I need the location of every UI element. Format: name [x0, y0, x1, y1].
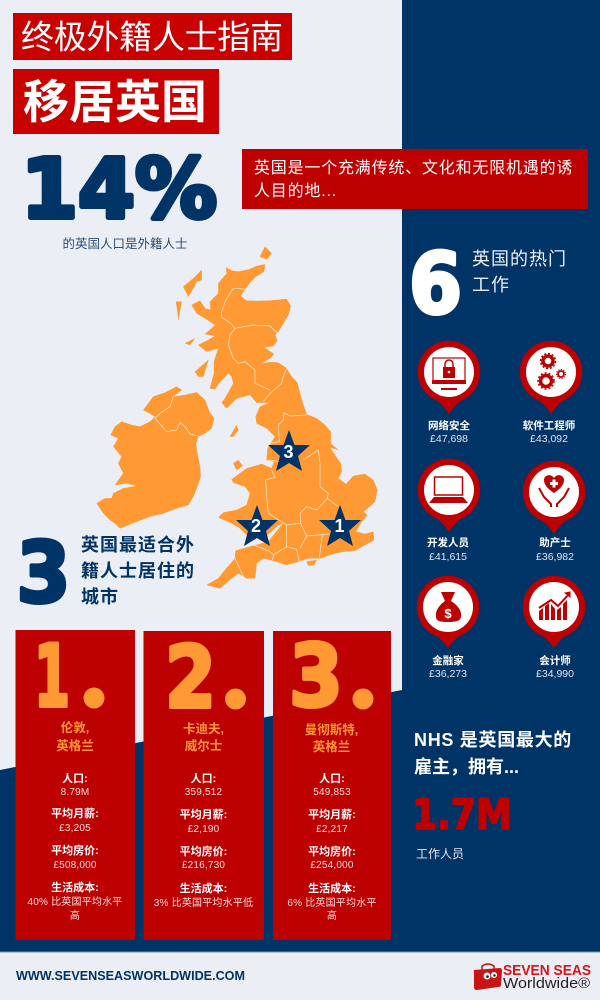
panel: Cardiff: 生活成本: — [180, 881, 227, 895]
panel: London: £3,205 — [59, 823, 91, 834]
heading: top 6 jobs — [409, 235, 567, 333]
map marker: star 1 — [319, 505, 361, 546]
logo: Seven Seas Worldwide: SEVEN SEAS — [503, 963, 591, 979]
callout: NHS: 雇主，拥有... — [414, 756, 519, 777]
panel: London: 40% 比英国平均水平 — [28, 895, 122, 908]
panel: London: 1 — [34, 627, 70, 727]
job: financier — [417, 576, 479, 680]
panel: London: 平均房价: — [51, 843, 99, 857]
job: software engineer: £43,092 — [530, 433, 568, 445]
panel: Manchester: £2,217 — [316, 824, 348, 835]
panel: London: 高 — [70, 909, 80, 922]
panel: Manchester: 6% 比英国平均水平 — [287, 896, 377, 909]
callout: intro: 人目的地... — [254, 182, 337, 200]
callout: NHS: 1.7M — [412, 790, 512, 839]
panel: Manchester: 英格兰 — [313, 739, 350, 754]
job: software engineer — [520, 341, 582, 445]
panel: Cardiff: £2,190 — [188, 824, 220, 835]
panel: Manchester: 平均月薪: — [308, 807, 356, 821]
callout: intro — [242, 149, 588, 209]
job: software engineer: 软件工程师 — [523, 419, 576, 432]
panel: Manchester: 平均房价: — [308, 844, 356, 858]
panel: Cardiff: 威尔士 — [185, 738, 222, 753]
panel: London: 人口: — [62, 772, 88, 785]
title: guide: 终极外籍人士指南 — [21, 18, 283, 56]
panel: Cardiff: 人口: — [191, 772, 216, 785]
heading: top 6 jobs: 6 — [409, 235, 462, 333]
job: financier: £36,273 — [429, 668, 467, 680]
panel: Manchester: 生活成本: — [308, 881, 356, 895]
job: accountant: £34,990 — [536, 668, 574, 680]
statistic: 14 percent: 的英国人口是外籍人士 — [62, 236, 188, 251]
callout: intro: 英国是一个充满传统、文化和无限机遇的诱 — [254, 159, 573, 177]
job: cyber security — [418, 341, 480, 445]
heading: top 3 cities: 城市 — [81, 586, 119, 607]
job: midwife — [523, 461, 585, 563]
panel: Manchester: 高 — [327, 909, 337, 922]
panel: Manchester: £254,000 — [310, 860, 354, 871]
footer: website: WWW.SEVENSEASWORLDWIDE.COM — [16, 968, 245, 983]
logo: Seven Seas Worldwide — [474, 963, 591, 992]
job: accountant — [523, 576, 585, 680]
panel: Cardiff: 359,512 — [185, 787, 223, 798]
callout: NHS: NHS 是英国最大的 — [414, 729, 572, 750]
panel: London: 伦敦, — [61, 720, 89, 735]
panel: London — [16, 627, 135, 940]
job: financier: 金融家 — [432, 654, 464, 667]
panel: Cardiff: £216,730 — [182, 860, 225, 871]
statistic: 14 percent: 14% — [21, 142, 217, 238]
logo: Seven Seas Worldwide: Worldwide® — [503, 975, 590, 992]
job: cyber security: 网络安全 — [428, 419, 470, 432]
heading: top 3 cities: 籍人士居住的 — [81, 561, 195, 581]
job: developer: 开发人员 — [427, 536, 469, 549]
panel: Cardiff: 平均房价: — [180, 844, 227, 858]
job: cyber security: £47,698 — [430, 433, 468, 445]
job: developer: £41,615 — [429, 551, 467, 563]
map marker: star 3: 3 — [283, 442, 294, 462]
panel: Cardiff: 平均月薪: — [180, 807, 227, 821]
heading: top 6 jobs: 工作 — [472, 275, 510, 295]
panel: Cardiff: 2 — [165, 628, 216, 728]
panel: London: 平均月薪: — [51, 806, 99, 820]
job: midwife: £36,982 — [536, 551, 574, 563]
panel: London: 英格兰 — [56, 738, 94, 753]
heading: top 3 cities: 英国最适合外 — [81, 534, 195, 555]
title: moving to UK: 移居英国 — [23, 76, 207, 128]
heading: top 3 cities: 3 — [16, 524, 70, 622]
job: developer — [418, 459, 480, 563]
panel: Manchester: 549,853 — [313, 787, 351, 798]
heading: top 6 jobs: 英国的热门 — [472, 249, 567, 269]
panel: Manchester: 人口: — [319, 772, 345, 785]
callout: NHS — [412, 729, 572, 861]
panel: London: 8.79M — [61, 787, 89, 798]
map marker: star 3 — [268, 430, 310, 471]
map: UK and Ireland — [97, 247, 377, 588]
panel: Cardiff: 卡迪夫, — [183, 721, 224, 736]
panel: London: 生活成本: — [51, 880, 99, 894]
job: accountant: 会计师 — [539, 654, 571, 667]
panel: Manchester — [273, 627, 391, 940]
heading: top 3 cities — [16, 524, 195, 622]
panel: Cardiff: 3% 比英国平均水平低 — [154, 896, 253, 909]
job: midwife: 助产士 — [539, 536, 571, 549]
panel: London: £508,000 — [53, 860, 97, 871]
map marker: star 1: 1 — [334, 516, 345, 536]
job: financier: $ — [444, 606, 452, 621]
panel: Manchester: 曼彻斯特, — [305, 722, 358, 737]
map marker: star 2 — [236, 505, 278, 546]
map marker: star 2: 2 — [251, 516, 261, 536]
panel: Manchester: 3 — [289, 627, 343, 727]
callout: NHS: 工作人员 — [416, 847, 464, 861]
panel: Cardiff — [144, 628, 264, 940]
